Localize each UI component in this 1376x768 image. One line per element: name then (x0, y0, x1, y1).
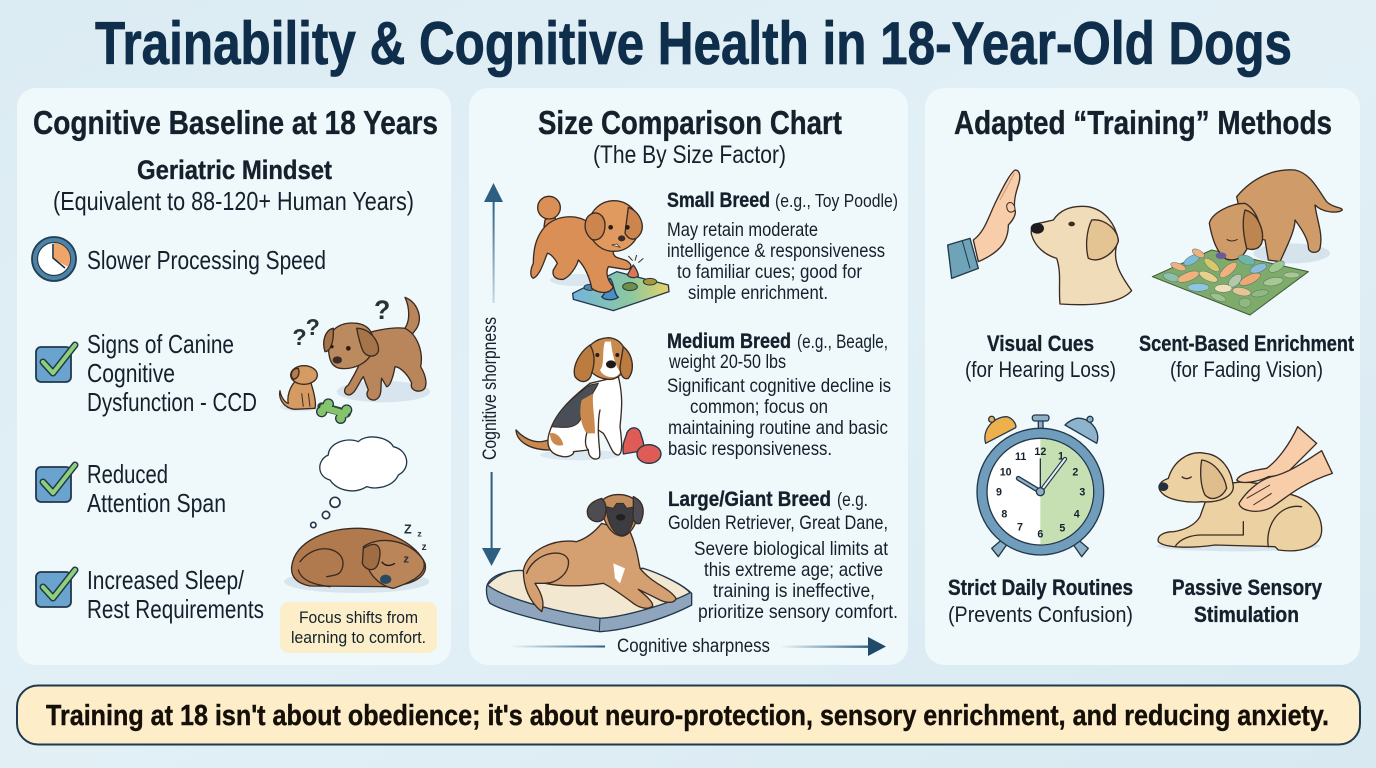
text: large giant breed: Severe biological limits at (694, 538, 889, 560)
text: small breed (667, 189, 898, 304)
text: visual cues (965, 331, 1116, 382)
text: small breed: May retain moderate (667, 219, 818, 241)
arrow: vertical up (484, 183, 503, 303)
illustration: alarm clock: 6 (1037, 529, 1043, 541)
arrow: horizontal axis left (510, 646, 605, 648)
text: medium breed: (e.g., Beagle, (797, 332, 888, 353)
text: medium breed: maintaining routine and basic (668, 417, 888, 439)
illustration: alarm clock: 11 (1015, 451, 1026, 463)
text: visual cues: (for Hearing Loss) (965, 357, 1116, 382)
text: signs of CCD: Dysfunction - CCD (87, 387, 257, 417)
text: scent based enrichment: (for Fading Vision) (1170, 357, 1323, 382)
bone (322, 407, 347, 413)
illustration: sleeping dog with thought cloud (284, 437, 429, 593)
illustration: alarm clock: 8 (1001, 508, 1007, 520)
text: medium breed: Significant cognitive decline is (667, 375, 891, 397)
illustration: confused dogs with bone: ? (374, 295, 390, 325)
text: signs of CCD: Cognitive (87, 358, 175, 388)
panel: adapted training methods (925, 88, 1360, 665)
small dog (280, 380, 315, 409)
text: small breed: simple enrichment. (688, 282, 828, 304)
illustration: alarm clock: 5 (1059, 522, 1065, 534)
text: increased sleep: Increased Sleep/ (87, 565, 245, 595)
illustration: alarm clock: 2 (1072, 467, 1078, 479)
arrow: vertical down (482, 472, 501, 566)
text: small breed: to familiar cues; good for (677, 261, 862, 283)
text: strict daily routines: (Prevents Confusion) (948, 602, 1133, 627)
illustration: hand signal and dog (948, 170, 1132, 305)
illustration: toy poodle with puzzle board (531, 196, 669, 311)
icon: checkbox 3 (36, 570, 75, 607)
axis label: horizontal: Cognitive sharpness (617, 636, 770, 657)
illustration: sleeping dog with thought cloud: Z (404, 522, 412, 536)
text: small breed: intelligence & responsiveness (667, 240, 885, 262)
text: large giant breed: Large/Giant Breed (668, 488, 831, 511)
text: large giant breed: (e.g. (837, 490, 868, 511)
text: large giant breed: this extreme age; active (704, 559, 883, 581)
illustration: alarm clock (977, 415, 1104, 557)
subheading: geriatric mindset: Geriatric Mindset (137, 155, 332, 185)
text: medium breed: weight 20-50 lbs (668, 352, 786, 373)
illustration: sleeping dog with thought cloud: z (417, 529, 422, 539)
text: signs of CCD: Signs of Canine (87, 329, 234, 359)
illustration: alarm clock: 3 (1079, 487, 1085, 499)
callout: focus shifts: Focus shifts from (299, 608, 418, 627)
illustration: sleeping dog with thought cloud: z (403, 554, 409, 566)
text: reduced attention span: Attention Span (87, 488, 226, 518)
text: passive sensory stimulation: Stimulation (1194, 602, 1299, 627)
text: medium breed (667, 330, 891, 460)
text: reduced attention span: Reduced (87, 459, 168, 489)
text: large giant breed: Golden Retriever, Great Dane, (668, 512, 888, 534)
subheading: by size factor: (The By Size Factor) (593, 141, 786, 169)
text: slower processing speed: Slower Processing Speed (87, 245, 326, 275)
text: small breed: Small Breed (667, 189, 770, 212)
illustration: alarm clock: 1 (1058, 450, 1064, 462)
illustration: confused dogs with bone: ? (306, 314, 320, 340)
illustration: alarm clock: 9 (996, 487, 1002, 499)
text: increased sleep (87, 565, 264, 624)
text: strict daily routines (948, 575, 1133, 627)
text: medium breed: Medium Breed (667, 330, 791, 353)
illustration: hands petting dog (1157, 427, 1332, 551)
panel: size comparison (469, 88, 908, 665)
heading: size comparison chart: Size Comparison Chart (538, 104, 842, 141)
text: medium breed: basic responsiveness. (668, 438, 832, 460)
illustration: alarm clock: 4 (1074, 508, 1080, 520)
illustration: sleeping dog with thought cloud: z (422, 542, 427, 553)
text: signs of CCD (87, 329, 257, 417)
illustration: alarm clock: 12 (1034, 446, 1046, 458)
illustration: alarm clock: 7 (1017, 522, 1023, 534)
axis label: vertical: Cognitive shorpness (480, 317, 501, 460)
banner: key takeaway (17, 686, 1360, 744)
text: large giant breed: prioritize sensory comfort. (698, 601, 898, 623)
callout: focus shifts (280, 602, 437, 653)
illustration: beagle with red toy (516, 338, 661, 463)
text: scent based enrichment (1139, 331, 1354, 382)
illustration: alarm clock: 10 (1000, 467, 1012, 479)
text: passive sensory stimulation: Passive Sensory (1172, 575, 1322, 600)
text: visual cues: Visual Cues (987, 331, 1094, 356)
text: reduced attention span (87, 459, 226, 518)
text: large giant breed (668, 488, 898, 623)
text: human years equivalent: (Equivalent to 88-120+ Human Years) (53, 186, 414, 216)
arrow: horizontal axis right (780, 637, 886, 656)
illustration: confused dogs with bone (280, 295, 430, 423)
text: small breed: (e.g., Toy Poodle) (775, 191, 898, 211)
heading: cognitive baseline: Cognitive Baseline at 18 Years (33, 104, 438, 141)
panel: cognitive baseline (17, 88, 451, 665)
illustration: confused dogs with bone: ? (292, 324, 307, 350)
text: passive sensory stimulation (1172, 575, 1322, 627)
text: increased sleep: Rest Requirements (87, 594, 264, 624)
icon: checkbox 1 (36, 345, 75, 382)
illustration: dog with snuffle mat (1152, 170, 1342, 315)
text: large giant breed: training is ineffective, (713, 580, 875, 602)
illustration: great dane on bed (486, 495, 692, 632)
text: strict daily routines: Strict Daily Routines (948, 575, 1133, 600)
icon: clock (32, 237, 76, 281)
icon: checkbox 2 (36, 465, 75, 502)
callout: focus shifts: learning to comfort. (291, 628, 426, 647)
text: medium breed: common; focus on (690, 396, 828, 418)
